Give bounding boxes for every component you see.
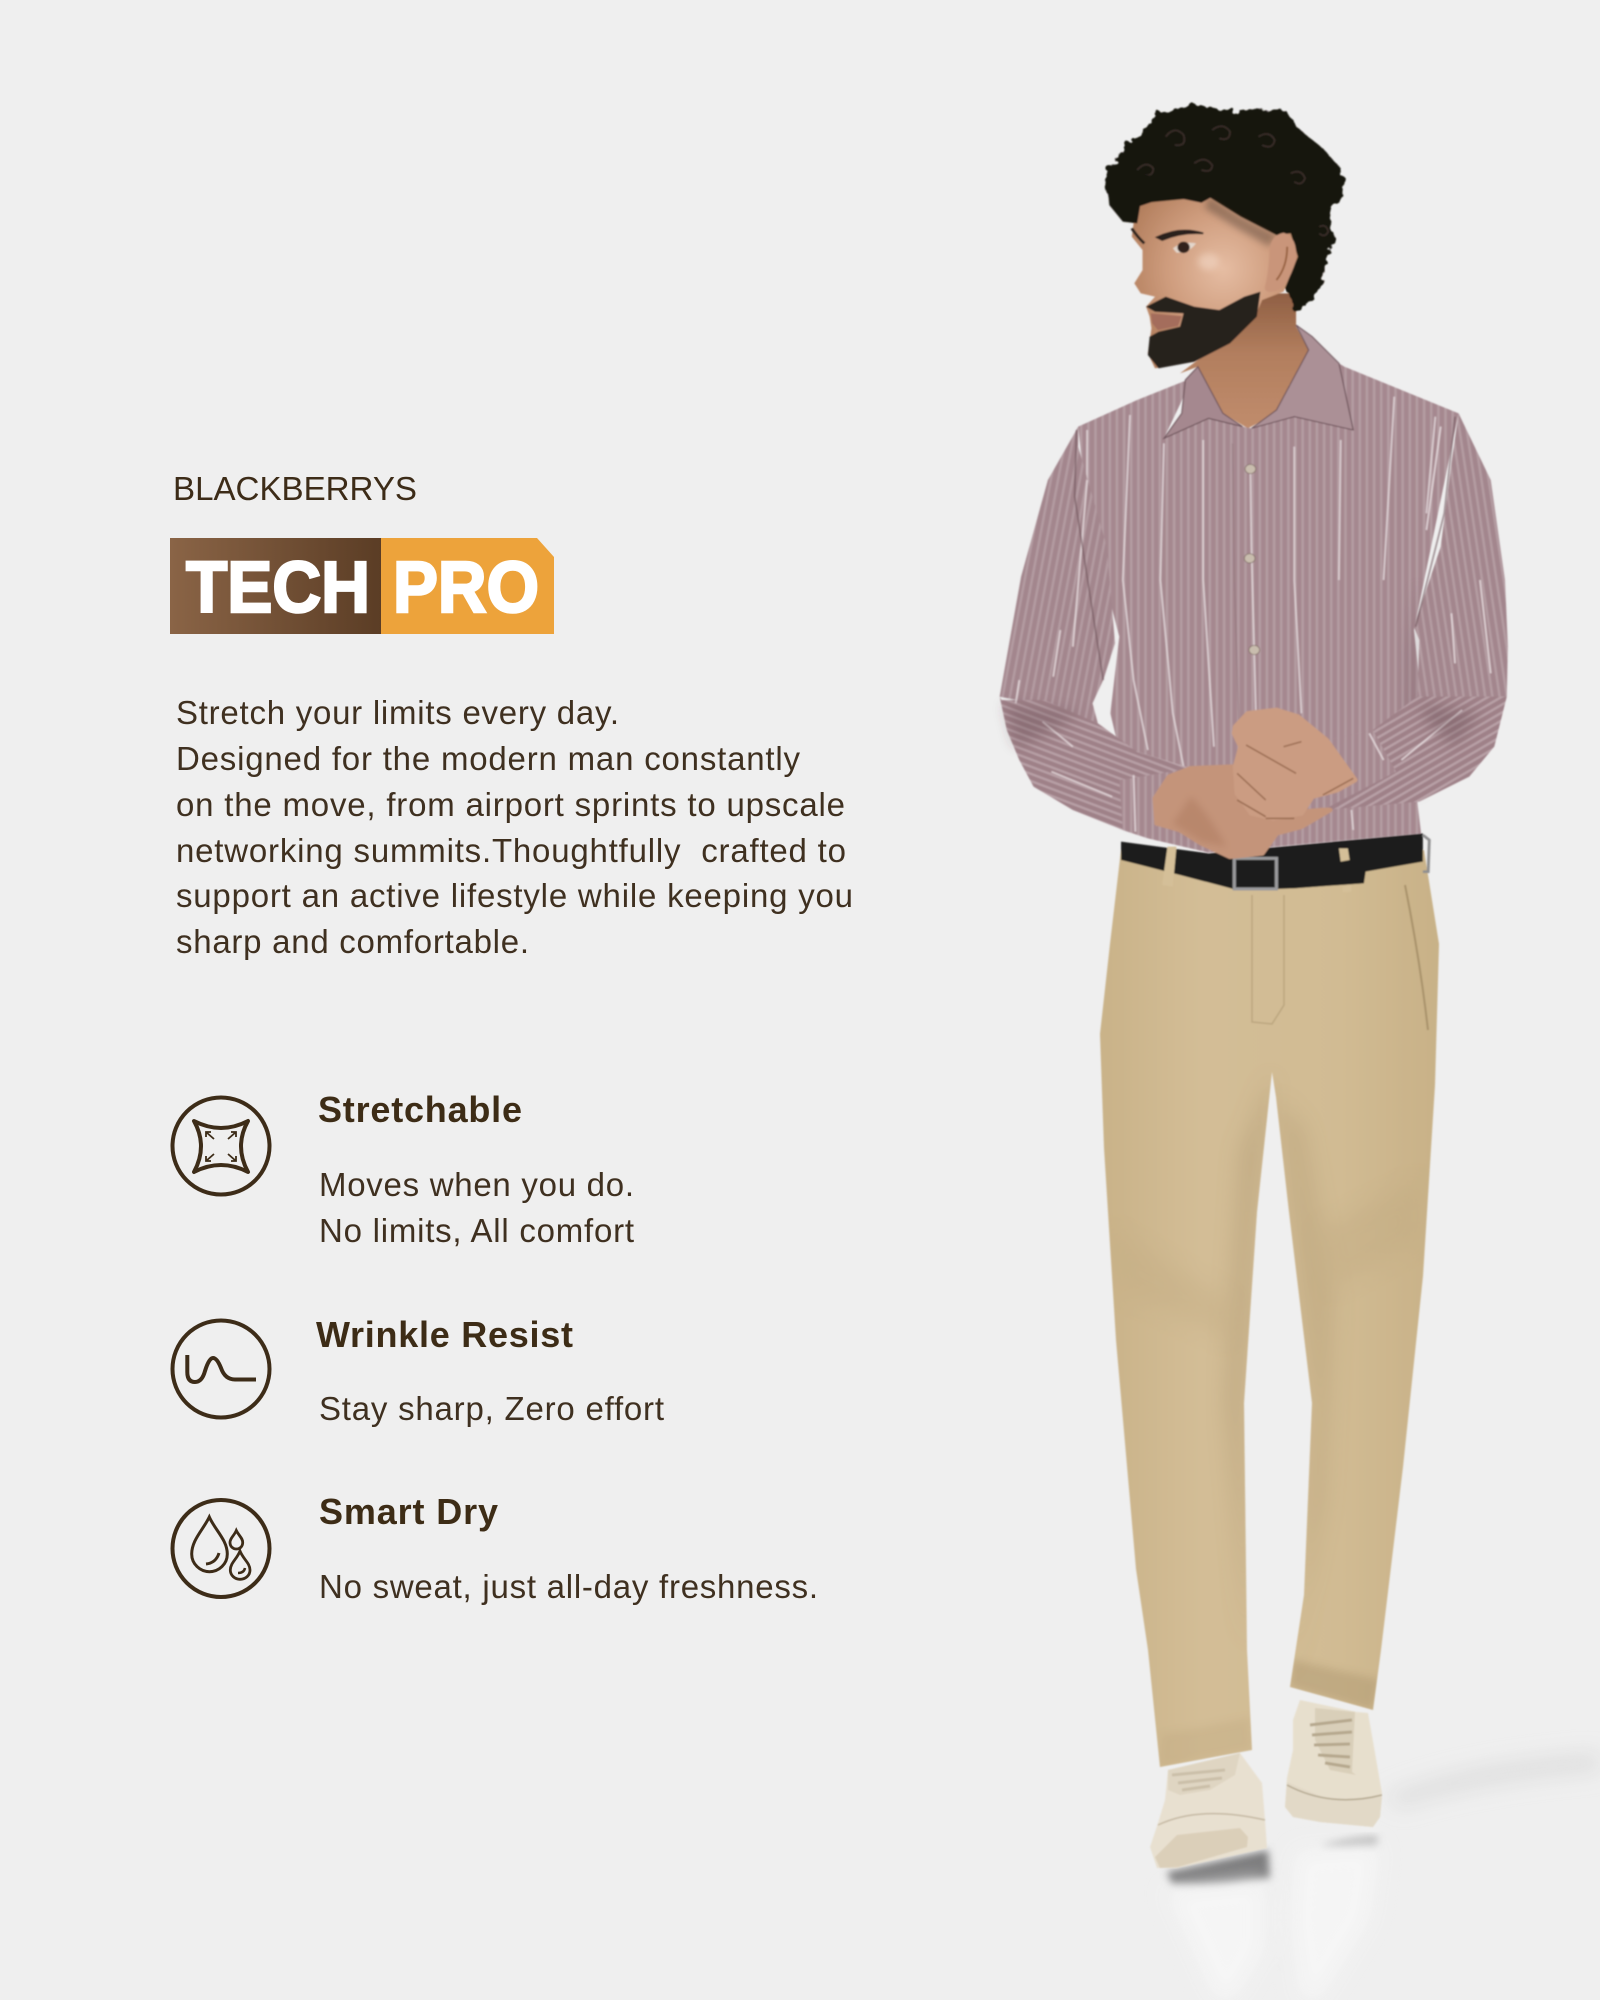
- feature: smart dry: [319, 1491, 818, 1605]
- icon: wrinkle resist: [172, 1320, 270, 1418]
- intro paragraph: sharp and comfortable.: [176, 923, 529, 960]
- intro paragraph: support an active lifestyle while keeping you: [176, 877, 853, 914]
- lips: [1151, 313, 1182, 330]
- model photo illustration: [1000, 105, 1600, 2000]
- hair: [1105, 105, 1344, 313]
- feature: smart dry: No sweat, just all-day freshness.: [319, 1568, 818, 1605]
- intro paragraph: Designed for the modern man constantly: [176, 740, 800, 777]
- shirt: sleeve right: [1323, 413, 1508, 810]
- feature: wrinkle resist: Stay sharp, Zero effort: [319, 1390, 664, 1427]
- floor shadows and reflections: [1165, 1752, 1600, 2000]
- trousers: [1100, 850, 1439, 1767]
- brand name: BLACKBERRYS: [173, 470, 417, 507]
- front hair lock: [1107, 173, 1212, 223]
- belt: [1121, 833, 1429, 892]
- intro paragraph: networking summits.Thoughtfully crafted to: [176, 832, 846, 869]
- shirt buttons: [1244, 464, 1260, 655]
- shoe: right: [1285, 1700, 1382, 1827]
- ear: [1265, 233, 1296, 292]
- feature: wrinkle resist: [316, 1314, 664, 1427]
- eyebrows: [1157, 230, 1203, 240]
- feature: wrinkle resist: Wrinkle Resist: [316, 1314, 573, 1355]
- shoe: left: [1150, 1753, 1267, 1868]
- collar: [1164, 325, 1353, 438]
- cheek shine: [1198, 253, 1219, 270]
- hands: [1155, 710, 1355, 857]
- beard: [1146, 292, 1260, 368]
- feature: stretchable: Stretchable: [318, 1089, 522, 1130]
- icon: smart dry: [172, 1500, 270, 1597]
- intro paragraph: [176, 694, 853, 960]
- logo: tech pro: TECH: [186, 548, 370, 628]
- eye: [1173, 243, 1196, 253]
- shirt: sleeve left: [1000, 427, 1191, 838]
- intro paragraph: on the move, from airport sprints to upscale: [176, 786, 845, 823]
- shirt: torso: [1078, 363, 1459, 853]
- feature: stretchable: [318, 1089, 634, 1249]
- face: [1107, 173, 1298, 368]
- feature: stretchable: Moves when you do.: [319, 1166, 634, 1203]
- logo: tech pro: PRO: [393, 548, 539, 628]
- icon: stretchable: [172, 1098, 270, 1194]
- feature: stretchable: No limits, All comfort: [319, 1212, 634, 1249]
- feature: smart dry: Smart Dry: [319, 1491, 498, 1532]
- neck: [1180, 293, 1309, 428]
- head, shirt, belt and hands in shared drawing coordinates: [1000, 105, 1508, 892]
- intro paragraph: Stretch your limits every day.: [176, 694, 619, 731]
- logo: tech pro: [170, 538, 554, 634]
